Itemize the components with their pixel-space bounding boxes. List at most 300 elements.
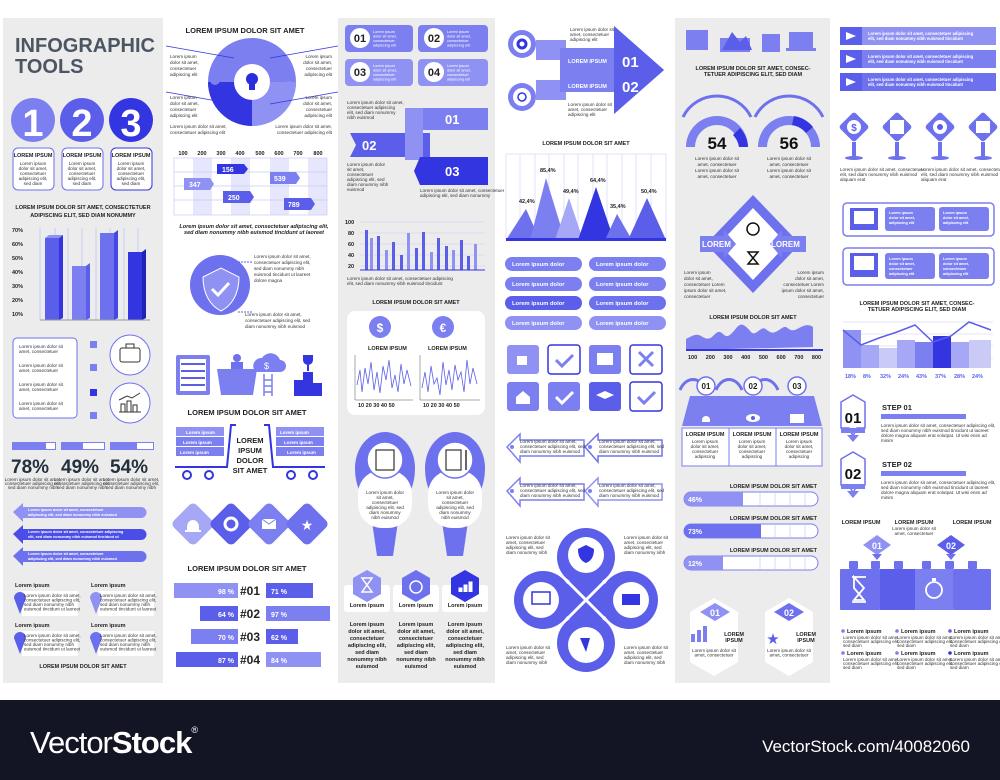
3d bar chart [12,228,150,320]
ranking bars: 97 % [271,612,288,619]
pill buttons: Lorem ipsum dolor [512,262,565,268]
numbered boxes 01-04: 04 [428,67,441,79]
bullet list: Lorem ipsum [847,651,882,657]
ribbon steps: diam nonummy nibh [347,182,389,187]
diamond with timers: dolor sit amet, [684,276,713,281]
diamond with timers: ipsum dolor sit amet, [684,288,726,293]
percentage stats: Lorem ipsum dolor sit amet, [54,477,110,482]
shield and globe [190,254,311,329]
ranking bars: 62 % [271,635,288,642]
shopping carts: Lorem ipsum [280,430,309,435]
bullet list: sed diam [950,643,969,648]
puzzle circle with lightbulb: Lorem ipsum [305,95,332,100]
gauges 54 56: amet, consectetuer [769,174,809,179]
numbered boxes 01-04: dolor sit amet, [373,68,397,72]
pins with icons: diam nonummy [369,510,401,515]
monitor panels [843,203,994,285]
3d bar chart: 50% [12,256,23,262]
pin list: euismod tincidunt ut laoreet [24,646,81,652]
step circles with icons table: LOREM IPSUM [686,432,725,438]
four-petal diagram: Lorem ipsum dolor sit [624,645,668,650]
text list box with icons: amet, consectetuer [19,406,59,411]
number boxes: dolor sit amet, [19,166,47,171]
number boxes: sed diam [73,181,91,186]
steps 01 02: 02 [845,466,861,483]
combo chart: TETUER ADIPISCING ELIT, SED DIAM [868,307,967,313]
four-petal diagram: amet, consectetuer [624,650,664,655]
shopping carts: Lorem ipsum [287,450,316,455]
monitor panels: adipiscing elit [889,221,915,225]
number circles: 2 [71,103,93,145]
tag chart: 539 [274,176,286,183]
number boxes: Lorem ipsum [20,161,46,166]
steps 01 02: minim [881,495,893,500]
diamond with timers: consectetuer [798,294,824,299]
pin list: euismod tincidunt ut laoreet [100,646,157,652]
pin list: Lorem ipsum dolor sit amet, [24,593,81,598]
number boxes: consectetuer [118,171,145,176]
step circles with icons table: dolor sit amet, [785,444,813,449]
arrow banners: adipiscing elit, sed diam nonummy nibh euismod [28,513,117,517]
hexagon icon boxes: nonummy nibh [445,657,485,663]
monitor panels: Lorem ipsum [943,211,967,215]
footer bar: ® [191,725,198,735]
pin icons: $ [851,123,857,134]
four-petal diagram: diam nonummy nibh [506,660,548,665]
banners: Lorem ipsum dolor sit amet, consectetuer adipiscing [868,77,973,82]
hexagon icon boxes: adipiscing elit, [446,643,485,649]
four-petal diagram: Lorem ipsum dolor sit [624,535,668,540]
steps 01 02: Lorem ipsum dolor sit amet, consectetuer adipiscing elit, [881,423,995,428]
pins with icons [355,432,485,556]
number circles: 1 [22,103,44,145]
bullet list: consectetuer adipiscing elit, [843,639,899,644]
pill buttons: Lorem ipsum dolor [596,321,649,327]
four-petal diagram: Lorem ipsum dolor sit [506,645,550,650]
tag chart: 600 [274,151,284,157]
arrow banners: adipiscing elit, sed diam nonummy nibh euismod [28,557,117,561]
number boxes: LOREM IPSUM [63,153,102,159]
steps 01 02: Lorem ipsum dolor sit amet, consectetuer adipiscing elit, [881,480,995,485]
panel: column 1 [5,35,159,670]
ribbon steps [347,100,505,198]
hexagon icon boxes: dolor sit amet, [348,629,386,635]
ranking bars: 64 % [218,612,235,619]
hexagon icon boxes: dolor sit amet, [397,629,435,635]
shopping carts: Lorem ipsum [186,430,215,435]
pin icons: Lorem ipsum dolor sit amet, consectetuer [840,167,924,172]
shopping carts: Lorem ipsum [284,440,313,445]
banners: elit, sed diam nonummy nibh euismod tincidunt [868,36,964,41]
pin icons [838,111,1000,182]
pin list: consectetuer adipiscing elit, [100,598,156,602]
monitor panels: adipiscing elit [889,272,915,276]
shopping carts: DOLOR [236,456,264,465]
ranking heading: LOREM IPSUM DOLOR SIT AMET [188,564,307,573]
bar chart column 3: 40 [348,253,354,259]
numbered boxes 01-04: 01 [354,33,366,45]
ribbon steps: elit, sed diam nonummy [347,110,396,115]
pins with icons: Lorem ipsum dolor [366,490,404,495]
bullet list: sed diam [950,665,969,670]
pin icons: elit, sed diam nonummy nibh euismod [921,172,999,177]
castle diagram: Lorem ipsum dolor sit [892,526,936,531]
pill buttons: Lorem ipsum dolor [596,301,649,307]
ribbon steps: adipiscing elit, sed diam nonummy [420,193,491,198]
hexagons 01 02: IPSUM [725,638,743,644]
3d bar chart: 40% [12,270,23,276]
puzzle circle with lightbulb: dolor sit amet, [303,60,332,65]
percentage stats: 78% [11,457,49,478]
arrow callouts: Lorem ipsum dolor sit amet, [520,439,577,444]
hexagon icon boxes: sed diam [453,650,477,656]
ranking bars: #01 [240,584,260,598]
shopping carts [175,425,325,479]
mountain chart: 50,4% [641,189,657,195]
currency charts: 10 20 30 40 50 [423,403,460,409]
diamond icon row [170,501,330,547]
gauges 54 56: amet, consectetuer [697,174,737,179]
number boxes: consectetuer [20,171,47,176]
four-petal diagram: Lorem ipsum dolor sit [506,535,550,540]
numbered boxes 01-04: dolor sit amet, [373,34,397,38]
area chart: LOREM IPSUM DOLOR SIT AMET [709,315,797,321]
gauges 54 56: amet, consectetuer [769,162,809,167]
ribbon steps: 01 [445,112,459,127]
currency charts [347,311,485,415]
tag chart: 400 [235,151,245,157]
arrow callouts: diam nonummy nibh euismod [520,493,580,498]
hexagon icon boxes: Lorem ipsum [448,603,482,609]
bar chart column 3: 60 [348,242,354,248]
ribbon steps: Lorem ipsum dolor [347,162,385,167]
tag chart: sed diam nonummy nibh euismod tincidunt ut laoreet [184,230,325,236]
icon row: abacus, speaker, cloud, trophy [176,353,322,396]
hexagons 01 02: LOREM [796,632,816,638]
number boxes: LOREM IPSUM [112,153,151,159]
diamond with timers: dolor sit amet, [795,276,824,281]
pins with icons: nibh euismod [371,515,399,520]
step circles with icons table: Lorem ipsum [739,439,765,444]
panel: column 5: LOREM IPSUM DOLOR SIT AMET, CONSEC- [696,66,810,72]
text list box with icons: amet, consectetuer [19,368,59,373]
arrow callouts: Lorem ipsum dolor sit amet, [520,483,577,488]
bar chart column 3: 20 [348,264,354,270]
footer bar: VectorStock [30,725,191,760]
percentage stats: consectetuer adipiscing elit, [5,481,61,486]
number boxes: adipiscing elit, [117,176,145,181]
percentage stats: consectetuer adipiscing elit, [54,481,110,486]
bullet list: sed diam [897,665,916,670]
puzzle circle with lightbulb: adipiscing elit [304,72,333,77]
bullet list: Lorem ipsum dolor sit amet, [843,635,900,640]
tag chart: 156 [222,167,234,174]
hexagons 01 02: Lorem ipsum dolor sit [767,648,811,653]
ribbon steps: Lorem ipsum dolor sit amet, [347,100,404,105]
hexagons 01 02: amet, consectetuer [769,652,809,658]
monitor panels: dolor sit amet, [943,216,969,220]
step circles with icons table: LOREM IPSUM [733,432,772,438]
pin list: Lorem ipsum dolor sit amet, [100,593,157,598]
tag chart: 250 [228,195,240,202]
arrow callouts: Lorem ipsum dolor sit amet, [599,483,656,488]
castle diagram: LOREM IPSUM [842,520,881,526]
hexagon icon boxes: nonummy nibh [347,657,387,663]
pins with icons: nibh euismod [441,515,469,520]
bar chart heading: ADIPISCING ELIT, SED DIAM NONUMMY [30,213,136,219]
castle diagram: LOREM IPSUM [953,520,992,526]
pill buttons: Lorem ipsum dolor [596,262,649,268]
arrow callouts: diam nonummy nibh euismod [599,449,659,454]
number boxes: LOREM IPSUM [14,153,53,159]
puzzle circle with lightbulb: consectetuer [306,107,332,112]
steps 01 02: STEP 01 [882,403,912,412]
pin list: Lorem ipsum dolor sit amet, [24,633,81,638]
currency charts: $ [377,321,384,335]
numbered boxes 01-04: adipiscing elit [373,44,397,48]
bullet list: Lorem ipsum [847,629,882,635]
arrow callouts [507,434,665,506]
progress bars [684,484,818,570]
pins with icons: sit amet, [446,495,464,500]
step circles with icons table: consectetuer [692,449,719,454]
puzzle circle with lightbulb: Lorem ipsum [170,95,197,100]
arrow banners [13,503,146,566]
number boxes: Lorem ipsum [118,161,144,166]
mountain chart: 64,4% [590,178,606,184]
hexagons 01 02: LOREM [724,632,744,638]
step circles with icons table: dolor sit amet, [738,444,766,449]
pin list: Lorem ipsum dolor sit amet, [100,633,157,638]
hexagon icon boxes: Lorem ipsum [399,603,433,609]
gear arrow 01 02: amet, consectetuer [568,107,608,112]
numbered boxes 01-04 [345,25,488,86]
combo chart [843,301,993,380]
step circles with icons table: consectetuer [786,449,813,454]
puzzle circle with lightbulb: Lorem ipsum dolor sit amet, [275,124,332,129]
mountain chart heading: LOREM IPSUM DOLOR SIT AMET [542,141,630,147]
monitor panels: adipiscing elit [943,221,969,225]
gear arrow 01 02: LOREM IPSUM [568,59,607,65]
arrow callouts: diam nonummy nibh euismod [520,449,580,454]
3d bar chart: 20% [12,298,23,304]
numbered boxes 01-04: consectetuer [447,73,469,77]
step circles with icons table: Lorem ipsum [692,439,718,444]
castle diagram: 01 [872,541,882,551]
hexagons 01 02: Lorem ipsum dolor sit [692,648,736,653]
currency charts: LOREM IPSUM [368,346,407,352]
steps 01 02: STEP 02 [882,460,912,469]
mountain chart: 42,4% [519,199,535,205]
puzzle circle with lightbulb: consectetuer adipiscing elit [277,130,333,135]
four-petal diagram: adipiscing elit, sed [624,655,662,660]
3d bar chart: 60% [12,242,23,248]
pin list: Lorem ipsum [15,583,50,589]
puzzle circle with lightbulb: adipiscing elit [170,113,198,118]
puzzle circle with lightbulb: adipiscing elit [170,72,198,77]
gear arrow 01 02: adipiscing elit [568,112,596,117]
four-petal diagram: amet, consectetuer [506,540,546,545]
gear arrow 01 02 [508,26,664,117]
combo chart: 24% [898,374,909,380]
four-petal diagram: amet, consectetuer [506,650,546,655]
step circles with icons table: 02 [749,382,758,391]
numbered boxes 01-04: Lorem ipsum [447,30,469,34]
ranking bars: 84 % [271,658,288,665]
pin list: euismod tincidunt ut laoreet [24,606,81,612]
tag chart: Lorem ipsum dolor sit amet, consectetuer adipiscing elit, [179,224,329,230]
pin list [14,583,157,670]
puzzle circle with lightbulb: consectetuer adipiscing elit [170,130,226,135]
arrow callouts: consectetuer adipiscing elit, sed [520,488,586,493]
ribbon steps: consectetuer adipiscing [347,105,395,110]
ribbon steps: consectetuer [347,172,374,177]
pin icons: aliquam erat [840,177,866,182]
monitor panels: adipiscing elit [943,272,969,276]
arrow banners: Lorem ipsum dolor sit amet, consectetuer adipiscing [28,530,123,534]
area chart [686,315,823,361]
shopping carts: Lorem ipsum [180,450,209,455]
banners [840,27,996,91]
panel: column 5 [680,30,824,676]
footer bar [0,700,1000,780]
combo chart: 18% [845,374,856,380]
shield and globe: diam nonummy nibh euismod [245,324,305,329]
pill buttons: Lorem ipsum dolor [512,301,565,307]
tag chart: 347 [189,182,201,189]
four-petal diagram: adipiscing elit, sed [506,655,544,660]
pin list: euismod tincidunt ut laoreet [100,606,157,612]
tag chart: 789 [288,202,300,209]
ribbon steps: adipiscing elit, sed [347,177,385,182]
pins with icons: adipiscing elit, sed [366,505,404,510]
pin icons: aliquam erat [921,177,947,182]
pin list: Lorem ipsum [15,623,50,629]
gear arrow 01 02: 01 [622,54,639,71]
bullet list: sed diam [843,643,862,648]
ranking bars: #03 [240,630,260,644]
numbered boxes 01-04: adipiscing elit [447,78,471,82]
monitor panels: consectetuer [943,267,967,271]
hexagon icon boxes: sed diam [404,650,428,656]
currency charts: € [440,321,447,335]
steps 01 02: sed diam nonummy nibh euismod tincidunt ut laoreet [881,485,989,490]
ranking bars [174,583,330,667]
shield and globe: sed diam nonummy nibh [254,266,304,271]
bar chart column 3 [345,220,485,286]
diamond with timers: ipsum dolor sit amet, [782,288,824,293]
gauges 54 56: Lorem ipsum dolor sit [767,168,812,173]
arrow banners: Lorem ipsum dolor sit amet, consectetuer [28,508,104,512]
number boxes: dolor sit amet, [117,166,145,171]
number boxes: adipiscing elit, [68,176,96,181]
shopping carts: LOREM [236,436,264,445]
pins with icons: adipiscing elit, sed [436,505,474,510]
text list box with icons: Lorem ipsum dolor sit [19,363,64,368]
gauges 54 56: Lorem ipsum dolor sit [695,156,739,161]
pin list: consectetuer adipiscing elit, [24,598,80,602]
tag chart: 500 [255,151,265,157]
puzzle circle with lightbulb: dolor sit amet, [170,101,199,106]
numbered boxes 01-04: consectetuer [373,39,395,43]
numbered boxes 01-04: adipiscing elit [373,78,397,82]
percentage stats: Lorem ipsum dolor sit amet, [5,477,61,482]
puzzle circle with lightbulb: Lorem ipsum [305,54,332,59]
bar chart column 3: 100 [345,220,354,226]
combo chart: 43% [916,374,927,380]
monitor panels: dolor sit amet, [889,262,915,266]
bullet list: Lorem ipsum dolor sit amet, [897,657,954,662]
gear arrow 01 02: amet, consectetuer [570,32,610,37]
ribbon steps: Lorem ipsum dolor sit amet, consectetuer [420,188,504,193]
step circles with icons table: adipiscing [742,454,763,459]
numbered boxes 01-04: adipiscing elit [447,44,471,48]
hexagon icon boxes: Lorem ipsum [399,622,433,628]
title: TOOLS [15,56,84,78]
bullet list: consectetuer adipiscing elit, [897,661,953,666]
pins with icons: consectetuer [442,500,469,505]
hexagons 01 02 [690,598,816,676]
ribbon steps: nibh euismod [347,115,375,120]
hexagon icon boxes: sed diam [355,650,379,656]
area chart: 100 200 300 400 500 600 700 800 [688,355,821,361]
hexagon icon boxes: euismod [454,664,476,670]
bullet list: consectetuer adipiscing elit, [843,661,899,666]
pill buttons: Lorem ipsum dolor [512,321,565,327]
gear arrow 01 02: 02 [622,79,639,96]
pin list: consectetuer adipiscing elit, [100,638,156,642]
arrow callouts: consectetuer adipiscing elit, sed [599,488,665,493]
pin list: consectetuer adipiscing elit, [24,638,80,642]
castle diagram: amet, consectetuer [894,531,934,536]
banners: Lorem ipsum dolor sit amet, consectetuer adipiscing [868,54,973,59]
icon grid [507,345,662,411]
hexagon icon boxes: consectetuer [448,636,483,642]
ranking bars: 70 % [218,635,235,642]
pin list: sed diam nonummy nibh [24,642,74,647]
step circles with icons table: Lorem ipsum [786,439,812,444]
pin list: Lorem ipsum [91,623,126,629]
panel: column 4 [505,26,669,672]
combo chart: 32% [880,374,891,380]
icon row: abacus, speaker, cloud, trophy: $ [264,361,269,371]
gauges 54 56 [683,96,823,179]
gauges 54 56: Lorem ipsum dolor sit [767,156,811,161]
step circles with icons table: 03 [793,382,802,391]
combo chart: LOREM IPSUM DOLOR SIT AMET, CONSEC- [860,301,974,307]
ranking bars: 71 % [271,589,288,596]
ribbon steps: euismod [347,187,365,192]
gauges 54 56: Lorem ipsum dolor sit [695,168,740,173]
four-petal diagram: diam nonummy nibh [624,660,666,665]
text list box with icons [13,335,150,423]
bullet list: Lorem ipsum [954,651,989,657]
combo chart: 24% [972,374,983,380]
pin icons: elit, sed diam nonummy nibh euismod [840,172,918,177]
progress bars: LOREM IPSUM DOLOR SIT AMET [730,484,818,490]
hexagon icon boxes: Lorem ipsum [448,622,482,628]
steps 01 02 [841,395,995,500]
tag chart: 300 [216,151,226,157]
combo chart: 37% [935,374,946,380]
banners: elit, sed diam nonummy nibh euismod tincidunt [868,82,964,87]
bar chart column 3: 80 [348,231,354,237]
background columns [3,18,830,683]
title: INFOGRAPHIC [15,35,155,57]
step circles with icons table: 01 [702,382,711,391]
text list box with icons: amet, consectetuer [19,349,59,354]
percentage stats: 54% [110,457,148,478]
